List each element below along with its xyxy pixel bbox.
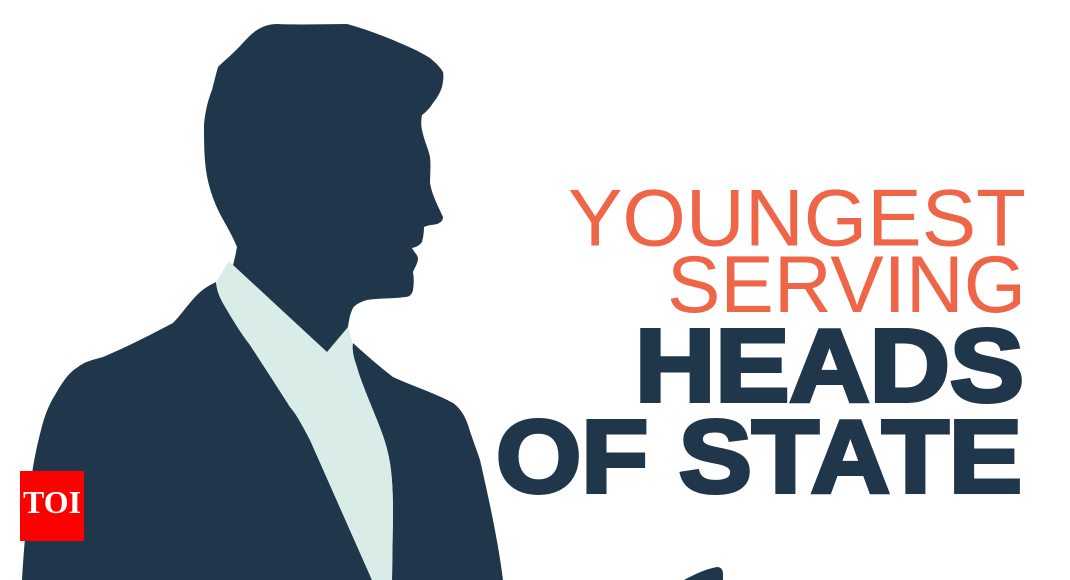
title line: SERVING: SERVING <box>667 240 1026 330</box>
title line: YOUNGEST: YOUNGEST <box>568 174 1026 264</box>
shirt collar <box>216 261 393 580</box>
head and neck <box>204 24 443 352</box>
title line: OF STATE: OF STATE <box>496 399 1022 514</box>
illustration: man in suit silhouette <box>22 24 503 580</box>
jacket left <box>22 282 372 580</box>
partial shape at bottom edge <box>684 567 723 580</box>
title line: HEADS: HEADS <box>635 308 1024 423</box>
title <box>496 174 1026 514</box>
jacket right <box>353 343 503 580</box>
badge: TOI logo: TOI <box>23 484 81 520</box>
badge: TOI logo <box>20 471 84 541</box>
